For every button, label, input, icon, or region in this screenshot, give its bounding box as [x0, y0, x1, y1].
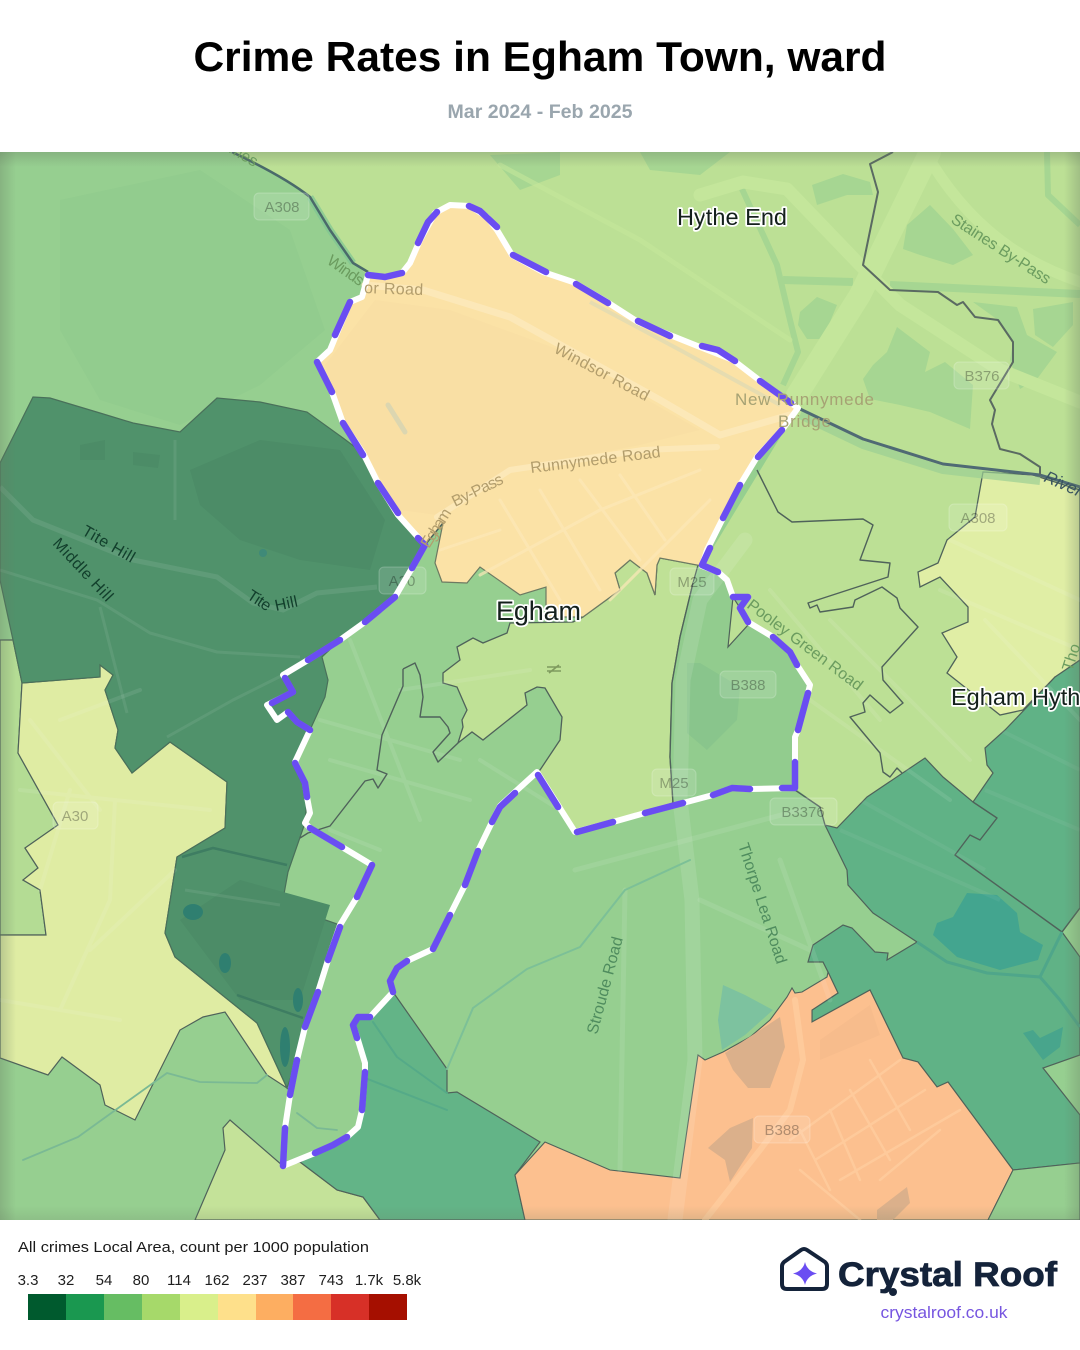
road and river labels: or Road [364, 280, 423, 299]
area: north-east light green [232, 152, 1080, 828]
legend labels: 162 [204, 1272, 230, 1289]
legend labels: 743 [318, 1272, 344, 1289]
water channels north-east [742, 152, 1080, 385]
wordmark: Crystal Roof [838, 1256, 1058, 1294]
rivers and upper boundaries [232, 152, 1080, 487]
area: M25 pocket green [670, 580, 694, 799]
road and river labels: Staines By-Pass [948, 211, 1054, 288]
legend colour scale [28, 1294, 407, 1320]
title: Crime Rates in Egham Town, ward [194, 33, 886, 80]
inner boundaries [300, 470, 918, 838]
main roads north-east [498, 162, 1038, 386]
east lakes [863, 801, 1080, 1060]
legend labels: 387 [280, 1272, 306, 1289]
website url: crystalroof.co.uk [880, 1303, 1008, 1322]
road and river labels: By-Pass [449, 471, 506, 511]
legend labels: 3.3 [18, 1272, 38, 1289]
road and river labels [49, 141, 1080, 1036]
road and river labels: Tite Hill [79, 523, 138, 566]
road badges: A30 [389, 573, 415, 590]
legend [18, 1239, 422, 1320]
road and river labels: Egham [418, 506, 455, 551]
road badges: M25 [659, 775, 689, 792]
area: south-east teal green [808, 660, 1080, 1170]
road badges [53, 193, 1009, 1143]
road and river labels: mes [226, 141, 261, 171]
legend labels: 80 [133, 1272, 149, 1289]
boundary between teal zones [795, 790, 1080, 932]
legend labels: 1.7k [355, 1272, 384, 1289]
road badges: B388 [730, 677, 766, 694]
logo: Crystal Roof [782, 1249, 1058, 1322]
choropleth map [0, 141, 1080, 1220]
forest shading north-west [60, 170, 325, 425]
road badges: B388 [764, 1122, 800, 1139]
station symbol [547, 665, 561, 673]
road and river labels: Stroude Road [584, 935, 627, 1036]
area: lakes north-east [490, 152, 1073, 429]
legend title: All crimes Local Area, count per 1000 population [18, 1239, 369, 1256]
ward parkland and roads [325, 285, 790, 600]
legend labels [18, 1272, 422, 1289]
legend labels: 237 [242, 1272, 268, 1289]
roads and streams in dark area [0, 440, 377, 1067]
road and river labels: Runnymede Road [529, 444, 662, 477]
place names: Hythe End [677, 204, 787, 230]
road badges: A308 [264, 199, 300, 216]
legend labels: 32 [58, 1272, 74, 1289]
road and river labels: Tite [244, 587, 274, 615]
area: Egham centre light green [443, 558, 698, 832]
road and river labels: Winds [324, 252, 367, 290]
area: south orange [515, 972, 1013, 1220]
legend labels: 5.8k [393, 1272, 422, 1289]
area: south-west pale yellow-green [0, 665, 287, 1120]
icon: keyhole tail on y [889, 1288, 897, 1296]
road and river labels: Middle Hill [49, 535, 116, 605]
road badges: B3376 [781, 804, 825, 821]
road and river labels: Thorpe Lea Road [734, 841, 789, 966]
place names: Egham [496, 596, 581, 626]
area: south teal green [300, 992, 540, 1220]
subtitle: date range: Mar 2024 - Feb 2025 [448, 102, 633, 123]
road badges: B376 [964, 368, 1000, 385]
place names [496, 204, 1080, 710]
road and river labels: Pooley Green Road [744, 597, 866, 694]
orange patches and roads [705, 1000, 960, 1220]
ward boundary [267, 205, 810, 1166]
road and river labels: Bridge [778, 412, 831, 431]
road badges: A30 [62, 808, 88, 825]
dark area shading [282, 892, 330, 920]
area: ward north pale orange [317, 205, 798, 617]
area: bottom-right greens [988, 1163, 1080, 1220]
road and river labels: New Runnymede [735, 390, 874, 409]
road and river labels: Windsor Road [551, 341, 652, 405]
icon: house with star [782, 1249, 827, 1289]
area: Egham Hythe pale [918, 472, 1080, 715]
south green details [0, 540, 1080, 1220]
legend labels: 54 [96, 1272, 112, 1289]
road and river labels: Hill [273, 594, 299, 615]
pocket patches [728, 597, 748, 647]
map edge vignette [0, 152, 1080, 1220]
road badges: M25 [677, 574, 707, 591]
area: bottom-left light green [195, 1120, 380, 1220]
area: dark green Englefield Green [0, 397, 425, 1088]
area: west light green [0, 640, 58, 935]
road badges: A308 [960, 510, 996, 527]
legend labels: 114 [167, 1272, 191, 1289]
